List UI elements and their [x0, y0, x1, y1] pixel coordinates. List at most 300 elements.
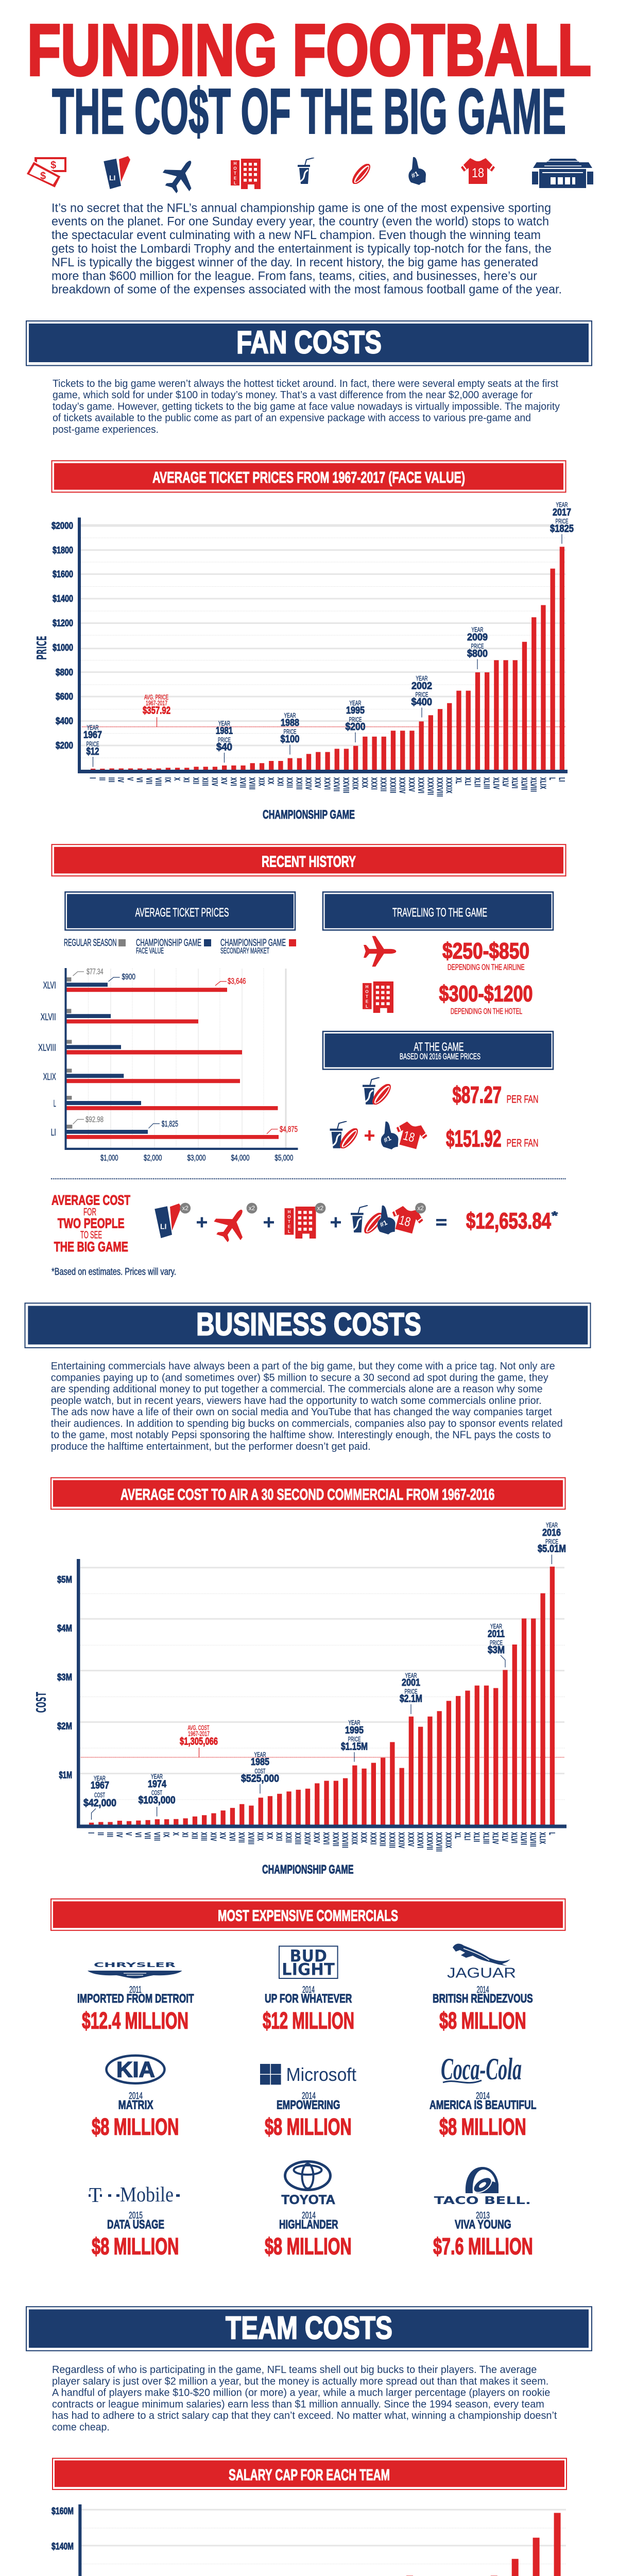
airfare: $250-$850 — [442, 939, 529, 963]
business costs text: The ads now have a life of their own on social media and YouTube that has changed the way companies target — [51, 1406, 552, 1418]
annotation 1974: 1974 — [148, 1779, 166, 1790]
icon: foam finger — [408, 157, 426, 185]
x axis game numerals: LI — [556, 777, 566, 782]
annotation 1967: $42,000 — [83, 1798, 116, 1809]
annotation 2001: YEAR — [405, 1671, 417, 1680]
annotation 2009: PRICE — [471, 642, 484, 650]
fan costs text: post-game experiences. — [53, 423, 159, 435]
icon: cup — [298, 158, 314, 184]
commercial: t-mobile: DATA USAGE — [107, 2217, 164, 2231]
x axis game numerals: L — [547, 777, 557, 780]
x axis game numerals: XV — [217, 1832, 227, 1840]
icon: cup, hot dog, finger, jersey: #1 — [382, 1134, 392, 1144]
x axis game numerals: XLIX — [538, 777, 547, 789]
banner: most expensive commercials: MOST EXPENSIVE COMMERCIALS — [218, 1906, 398, 1925]
fan costs text: of tickets available to the public come as part of an expensive package with access to various pre-game and — [53, 412, 531, 424]
x axis game numerals: XXXVI — [415, 1832, 424, 1849]
x axis game numerals: XL — [453, 1832, 462, 1839]
fan costs text — [53, 378, 560, 435]
annotation average price — [143, 693, 170, 727]
logo: microsoft — [260, 2064, 356, 2085]
annotation 1995: PRICE — [348, 1735, 361, 1743]
x axis game numerals: XLV — [500, 1832, 509, 1842]
x axis game numerals — [86, 1832, 556, 1852]
value callouts — [73, 968, 298, 1134]
banner: most expensive commercials — [51, 1899, 565, 1930]
x axis game numerals: XLVIII — [528, 777, 538, 792]
logo: toyota — [281, 2162, 335, 2207]
food and merch cost: PER FAN — [507, 1138, 539, 1149]
value callouts: $900 — [122, 973, 135, 981]
icon: cup, hot dog, finger, jersey — [330, 1120, 430, 1151]
x axis game numerals: XXVI — [322, 777, 332, 790]
annotation 1995: 1995 — [345, 1725, 364, 1736]
y axis labels: $2M — [57, 1721, 72, 1731]
x axis game numerals: XLV — [500, 777, 510, 787]
x axis game numerals: XLVII — [519, 777, 528, 790]
commercial: kia: 2014 — [129, 2091, 143, 2101]
x axis game numerals: XL — [453, 777, 462, 784]
legend: ticket prices: REGULAR SEASON — [64, 938, 116, 948]
legend: ticket prices: FACE VALUE — [136, 947, 164, 956]
x axis game numerals: XXXVII — [425, 777, 435, 795]
icon: hotel: L — [234, 181, 236, 185]
y axis labels: $600 — [56, 691, 73, 702]
section header: fan costs: FAN COSTS — [236, 325, 382, 361]
commercial: coca-cola: AMERICA IS BEAUTIFUL — [430, 2098, 537, 2112]
average cost label: AVERAGE COST — [52, 1192, 130, 1208]
icon: tickets — [104, 156, 130, 189]
annotation 1967: $12 — [87, 746, 99, 757]
icon: cup and hot dog — [363, 1077, 394, 1108]
icon: hotel: O — [233, 166, 237, 171]
x axis game numerals: XLII — [471, 1832, 481, 1842]
annotation average cost: AVG. COST — [187, 1724, 210, 1732]
icon: tickets x2 — [154, 1203, 191, 1238]
icon: food and merch x2 — [351, 1203, 426, 1236]
commercial: coca-cola: 2014 — [476, 2091, 490, 2101]
icon: money: $ — [40, 171, 46, 182]
annotation 1995: PRICE — [349, 716, 362, 723]
annotation average cost: $1,305,066 — [180, 1736, 218, 1748]
annotation 2011: 2011 — [488, 1629, 505, 1640]
x axis game numerals: XXVII — [330, 1832, 340, 1846]
annotation 2016: YEAR — [546, 1521, 558, 1529]
panel: at the game heading: BASED ON 2016 GAME PRICES — [400, 1052, 480, 1061]
commercial: t-mobile: 2015 — [129, 2210, 143, 2221]
legend: ticket prices: CHAMPIONSHIP GAME — [136, 938, 201, 948]
game labels: XLVIII — [38, 1043, 56, 1053]
icon: stadium — [532, 159, 593, 188]
x axis game numerals: XIII — [199, 1832, 208, 1841]
x axis game numerals: XXXII — [377, 1832, 387, 1846]
airfare — [442, 939, 529, 972]
annotation 1995: YEAR — [349, 699, 362, 707]
annotation 2009 — [467, 626, 488, 669]
x axis game numerals: XXIV — [302, 1832, 312, 1845]
chart: commercial cost — [34, 1521, 566, 1876]
x axis game numerals: XLIII — [482, 777, 491, 789]
y axis labels: $3M — [57, 1672, 72, 1683]
icon: food and merch x2: x2 — [418, 1206, 424, 1212]
business costs text — [51, 1360, 563, 1452]
business costs text: produce the halftime entertainment, but the performer doesn’t get paid. — [51, 1440, 371, 1452]
gray bars — [66, 977, 72, 1128]
icon: hotel: H — [366, 985, 369, 989]
value callouts: $3,646 — [228, 977, 246, 986]
annotation 2016: $5.01M — [538, 1544, 566, 1555]
panel: traveling to the game heading — [323, 892, 553, 930]
y axis labels — [57, 1574, 72, 1781]
x axis game numerals: XVI — [227, 1832, 236, 1841]
annotation average price: $357.92 — [143, 705, 170, 716]
icon: money: $ — [50, 160, 56, 171]
banner: average ticket prices: AVERAGE TICKET PRICES FROM 1967-2017 (FACE VALUE) — [152, 468, 465, 486]
annotation 2011: $3M — [488, 1645, 505, 1656]
intro text: events on the planet. For one Sunday every year, the country (even the world) stops to watch — [52, 215, 549, 229]
logo: jaguar: JAGUAR — [447, 1965, 516, 1981]
x axis game numerals: XXXVI — [416, 777, 425, 793]
footnote: *Based on estimates. Prices will vary. — [52, 1266, 176, 1278]
annotation 1988: YEAR — [284, 711, 296, 719]
annotation 2011: YEAR — [490, 1622, 502, 1630]
x axis game numerals: XXV — [313, 777, 322, 788]
food cost: PER FAN — [507, 1094, 539, 1106]
icon: hotel — [231, 159, 261, 189]
x axis game numerals: IV — [114, 1832, 124, 1838]
x axis game numerals: XXVIII — [340, 1832, 349, 1848]
hotel cost — [439, 981, 533, 1016]
annotation 1981: YEAR — [218, 719, 230, 727]
game labels: LI — [51, 1127, 56, 1138]
annotation 2009: $800 — [467, 648, 488, 659]
icon: hotel: T — [234, 171, 236, 176]
x axis game numerals: V — [124, 1832, 133, 1836]
axes — [65, 968, 298, 1150]
banner: recent history: RECENT HISTORY — [262, 852, 356, 870]
annotation 2016: PRICE — [545, 1537, 558, 1545]
x axis title: CHAMPIONSHIP GAME — [262, 1862, 353, 1876]
commercial: kia: $8 MILLION — [92, 2113, 179, 2140]
annotation 1967: PRICE — [87, 740, 99, 748]
x axis game numerals: XX — [266, 777, 275, 785]
icon: hotel x2: E — [288, 1224, 291, 1229]
x axis game numerals: IV — [115, 777, 125, 783]
annotation 2002: 2002 — [411, 681, 432, 691]
logo: chrysler — [88, 1961, 182, 1978]
x axis game numerals: XXXIV — [396, 1832, 406, 1849]
annotation 1985 — [241, 1751, 279, 1793]
annotation 1988: $100 — [280, 734, 300, 745]
x axis game numerals — [88, 777, 566, 797]
x axis game numerals: XXIII — [293, 1832, 302, 1844]
x axis game numerals: IX — [162, 777, 172, 783]
commercial: microsoft — [260, 2064, 356, 2140]
icon: foam finger: #1 — [410, 170, 420, 180]
x axis game numerals: XLVI — [509, 777, 519, 789]
x axis game numerals: XXXIX — [443, 1832, 453, 1849]
fan costs text: Tickets to the big game weren’t always the hottest ticket around. In fact, there were several empty seats at the first — [53, 378, 558, 389]
commercial: taco bell: 2013 — [476, 2210, 490, 2221]
intro text: gets to hoist the Lombardi Trophy and the entertainment is typically top-notch for the fans, the — [52, 242, 552, 256]
banner: average ticket prices — [52, 461, 565, 492]
section header: team costs — [26, 2307, 592, 2351]
business costs text: are spending additional money to put together a commercial. The commercials alone are a reason why some — [51, 1383, 543, 1395]
x axis game numerals: XXXIX — [444, 777, 453, 793]
annotation 2017: $1825 — [550, 523, 574, 534]
commercial: microsoft: 2014 — [302, 2091, 316, 2101]
team costs text: Regardless of who is participating in the game, NFL teams shell out big bucks to their players. The average — [52, 2364, 537, 2376]
team costs text: has had to adhere to a strict salary cap that they can’t exceed. No matter what, winning a championship doesn’t — [52, 2410, 557, 2421]
annotation average cost: 1967-2017 — [188, 1730, 210, 1737]
value callouts: $77.34 — [87, 968, 104, 976]
logo: bud light: LIGHT — [282, 1960, 335, 1979]
y axis labels — [52, 2506, 74, 2576]
bars — [89, 1567, 555, 1825]
banner: salary cap — [53, 2459, 566, 2489]
x axis game numerals: XXIX — [350, 777, 359, 790]
cost equation — [154, 1200, 558, 1248]
axes — [78, 2504, 568, 2576]
icon: hotel: T — [366, 994, 368, 999]
icon: hotel: E — [234, 176, 237, 180]
y axis labels: $800 — [56, 667, 73, 677]
x axis game numerals: XLIII — [480, 1832, 490, 1844]
commercial: coca-cola — [430, 2052, 537, 2140]
legend: ticket prices — [64, 938, 296, 956]
game labels: XLIX — [43, 1072, 56, 1082]
icon: hotel x2: O — [287, 1215, 291, 1219]
x axis game numerals: XXVII — [331, 777, 341, 791]
x axis game numerals: I — [88, 777, 97, 779]
x axis labels: $2,000 — [144, 1154, 162, 1163]
logo: bud light — [279, 1946, 338, 1979]
commercial: taco bell: $7.6 MILLION — [433, 2233, 533, 2260]
annotation 2001: 2001 — [402, 1677, 420, 1688]
icon: plane x2: x2 — [249, 1206, 255, 1212]
hotel cost: DEPENDING ON THE HOTEL — [451, 1007, 522, 1016]
x axis game numerals: XXIX — [349, 1832, 358, 1844]
commercial: microsoft: $8 MILLION — [265, 2113, 352, 2140]
game labels: XLVII — [41, 1012, 56, 1022]
annotation 2002: YEAR — [416, 674, 427, 682]
annotation 1981 — [216, 719, 233, 762]
y axis labels: $1000 — [53, 642, 73, 653]
hotel cost: $300-$1200 — [439, 981, 533, 1007]
x axis game numerals: XXI — [274, 1832, 283, 1841]
commercial: chrysler: $12.4 MILLION — [82, 2007, 188, 2033]
x axis game numerals: VI — [134, 777, 144, 783]
annotation 2009: YEAR — [472, 626, 483, 634]
x axis labels: $1,000 — [100, 1154, 118, 1163]
annotation 1988: 1988 — [281, 718, 299, 728]
business costs text: Entertaining commercials have always been a part of the big game, but they come with a price tag. Not only are — [51, 1360, 555, 1372]
x axis game numerals: VI — [133, 1832, 142, 1837]
average cost label — [52, 1192, 130, 1255]
commercial: t-mobile — [89, 2182, 180, 2260]
team costs text: contracts or league minimum salaries) earn less than $1 million annually. Since the 1994 season, every team — [52, 2398, 544, 2410]
icon: tickets: LI — [109, 174, 115, 182]
logo: toyota: TOYOTA — [281, 2193, 335, 2207]
commercial: bud light: 2014 — [302, 1985, 315, 1995]
icon: plane — [364, 936, 396, 967]
value callouts: $1,825 — [162, 1120, 178, 1128]
x axis game numerals: XIV — [209, 777, 219, 787]
x axis game numerals: XXXI — [369, 777, 379, 790]
game labels — [38, 980, 56, 1138]
y axis labels: $5M — [57, 1574, 72, 1585]
x axis game numerals: I — [86, 1832, 95, 1834]
commercial: microsoft: EMPOWERING — [277, 2098, 340, 2112]
annotation 1995: YEAR — [348, 1719, 360, 1726]
x axis game numerals: XX — [264, 1832, 274, 1839]
intro text: more than $600 million for the league. From fans, teams, cities, and businesses, here’s our — [52, 269, 537, 283]
x axis game numerals: XLI — [462, 777, 472, 786]
red bars — [66, 988, 279, 1139]
food and merch cost: $151.92 — [446, 1126, 502, 1152]
x axis game numerals: XXV — [312, 1832, 321, 1843]
x axis game numerals: X — [170, 1832, 180, 1836]
chart: average ticket prices — [35, 501, 574, 822]
intro text: NFL is typically the biggest winner of the day. In recent history, the big game has generated — [52, 256, 538, 269]
average cost label: TWO PEOPLE — [58, 1215, 125, 1231]
icon: hotel: H — [234, 161, 237, 166]
annotation 2009: 2009 — [467, 632, 488, 643]
y axis labels: $1600 — [53, 569, 73, 579]
icon: plane — [158, 151, 204, 199]
commercial: jaguar: $8 MILLION — [439, 2007, 526, 2033]
bars — [111, 2513, 561, 2576]
y axis labels: $160M — [52, 2506, 74, 2516]
team costs text: A handful of players make $10-$20 million (or more) a year, while a much larger percentage (players on rookie — [52, 2386, 550, 2399]
total: $12,653.84 — [466, 1209, 551, 1233]
annotation 2016 — [538, 1521, 566, 1564]
icon: tickets x2: x2 — [182, 1206, 188, 1212]
annotation 1974 — [139, 1773, 176, 1817]
x axis labels: $5,000 — [274, 1154, 293, 1163]
annotation 2001 — [400, 1671, 422, 1714]
icon: hotel x2: T — [288, 1219, 290, 1224]
icon: jersey: 18 — [472, 166, 484, 180]
x axis game numerals: II — [95, 1832, 105, 1836]
y axis title: PRICE — [35, 636, 50, 660]
y axis labels: $2000 — [52, 520, 73, 531]
x axis game numerals: II — [97, 777, 106, 781]
x axis game numerals: XXXVIII — [434, 1832, 443, 1852]
axes — [77, 1559, 566, 1828]
icon: jersey — [461, 158, 495, 184]
x axis game numerals: XV — [219, 777, 228, 785]
annotation 1981: PRICE — [218, 736, 231, 744]
y axis labels: $4M — [57, 1623, 72, 1633]
x axis game numerals: XXII — [283, 1832, 293, 1843]
x axis game numerals: XVIII — [247, 777, 256, 790]
annotation 2001: $2.1M — [400, 1693, 422, 1705]
commercial: jaguar: 2014 — [477, 1985, 489, 1995]
logo: kia — [106, 2056, 165, 2083]
annotation 1995: 1995 — [346, 705, 365, 716]
panel: average ticket prices heading — [65, 892, 295, 930]
commercial: kia — [92, 2056, 179, 2140]
annotation 2017: 2017 — [553, 507, 571, 518]
x axis labels: $3,000 — [187, 1154, 206, 1163]
panel: at the game heading — [323, 1031, 553, 1070]
annotation 1967: COST — [94, 1791, 105, 1799]
y axis labels: $200 — [56, 740, 73, 751]
logo: microsoft: Microsoft — [286, 2064, 356, 2085]
annotation average cost — [180, 1724, 218, 1757]
icon: hotel x2 — [285, 1203, 325, 1239]
x axis game numerals: VII — [142, 1832, 152, 1839]
annotation 1995: $200 — [345, 721, 366, 733]
x axis game numerals: XXXIV — [397, 777, 406, 794]
annotation 1985: COST — [254, 1767, 266, 1775]
annotation 1967: 1967 — [91, 1781, 109, 1791]
legend: ticket prices: SECONDARY MARKET — [220, 947, 269, 956]
value callouts: $92.98 — [85, 1115, 104, 1124]
annotation 1974: YEAR — [151, 1773, 163, 1781]
annotation 2011: PRICE — [490, 1639, 503, 1647]
commercial: toyota: 2014 — [302, 2210, 316, 2221]
x axis labels — [100, 1154, 293, 1163]
team costs text: player salary is just over $2 million a year, but the money is actually more spread out than that makes it seem. — [52, 2375, 548, 2387]
x axis game numerals: XII — [189, 1832, 199, 1839]
chart: salary cap — [36, 2504, 568, 2576]
commercial: chrysler: 2011 — [129, 1985, 142, 1995]
logo: jaguar — [447, 1944, 516, 1981]
annotation 1967 — [83, 1774, 116, 1820]
team costs text: come cheap. — [52, 2421, 110, 2433]
icon: hot dog — [349, 161, 373, 187]
bars — [91, 547, 564, 770]
commercial: kia: MATRIX — [118, 2098, 153, 2112]
x axis game numerals: III — [105, 1832, 114, 1837]
x axis game numerals: XIX — [256, 777, 266, 786]
x axis game numerals: IX — [161, 1832, 170, 1837]
icon: hotel: O — [365, 989, 369, 994]
x axis game numerals: XIV — [208, 1832, 217, 1841]
navy bars — [66, 982, 148, 1134]
x axis game numerals: XIII — [200, 777, 210, 786]
x axis game numerals: XXXV — [405, 1832, 415, 1847]
airfare: DEPENDING ON THE AIRLINE — [448, 963, 525, 972]
x axis game numerals: L — [546, 1832, 556, 1835]
x axis game numerals: XII — [191, 777, 200, 784]
annotation 1981: $40 — [216, 742, 232, 753]
chart: recent ticket prices — [38, 968, 298, 1163]
logo: coca-cola: Coca-Cola — [441, 2052, 522, 2086]
annotation 1974: $103,000 — [139, 1795, 176, 1806]
annotation 2002 — [411, 674, 432, 717]
banner: commercial cost — [51, 1478, 565, 1509]
commercial: jaguar: BRITISH RENDEZVOUS — [433, 1992, 533, 2006]
annotation 2002: $400 — [411, 697, 432, 708]
annotation 1967 — [83, 723, 102, 767]
x axis game numerals: XLVII — [519, 1832, 528, 1845]
panel: average ticket prices heading: AVERAGE TICKET PRICES — [135, 906, 229, 920]
x axis game numerals: XXII — [284, 777, 294, 788]
annotation 1974: COST — [151, 1789, 162, 1797]
x axis game numerals: XVIII — [246, 1832, 255, 1844]
y axis labels: $140M — [52, 2541, 74, 2551]
y axis labels: $400 — [56, 716, 73, 726]
x axis game numerals: VII — [144, 777, 153, 784]
x axis game numerals: XXVI — [321, 1832, 331, 1845]
chart: recent ticket prices: L — [54, 1098, 56, 1109]
icon: tickets x2: LI — [160, 1223, 166, 1231]
commercial: toyota — [265, 2162, 352, 2260]
fan costs text: today’s game. However, getting tickets to the big game at face value nowadays is virtually impossible. The majority — [53, 400, 560, 412]
